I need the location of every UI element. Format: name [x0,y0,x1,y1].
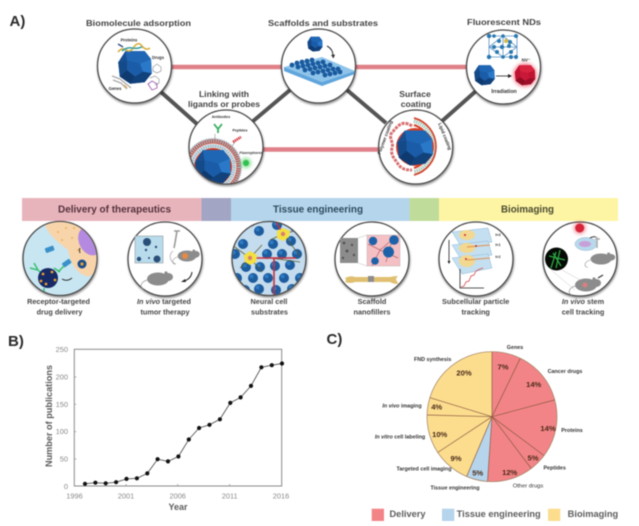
icon: biomolecule adsorption: Drugs [152,55,165,60]
caption: scaffold nanofillers [354,297,390,316]
percentages: 20% [456,368,472,378]
heading: surface coating [399,89,431,109]
slice labels: In vivo imaging [382,404,422,410]
legend [372,509,618,521]
x axis labels: 2006 [169,492,186,500]
percentages: 12% [502,468,518,477]
y axis labels: 100 [56,427,68,436]
band: application categories: Bioimaging [501,204,554,216]
band: application categories [22,198,618,221]
icon: linking with ligands or probes: Peptides [233,128,247,132]
caption: neural cell substrates: substrates [251,308,288,316]
slice labels [375,345,583,492]
caption: neural cell substrates: Neural cell [251,297,287,306]
caption: receptor-targeted drug delivery: drug delivery [37,308,83,316]
icon: receptor-targeted drug delivery [23,218,106,296]
icon: biomolecule adsorption: Proteins [121,38,138,42]
percentages: 9% [451,454,462,463]
heading: biomolecule adsorption: Biomolecule adsorption [86,18,191,28]
icon: fluorescent NDs [466,30,540,104]
band: application categories: Tissue engineering [273,204,363,216]
caption: in vivo stem cell tracking [562,297,605,316]
heading: fluorescent NDs: Fluorescent NDs [467,17,541,27]
y axis labels: 200 [56,372,68,382]
slice labels: In vitro cell labeling [375,434,425,440]
percentages: 7% [498,362,509,372]
caption: in vivo targeted tumor therapy: In vivo targeted [137,297,191,306]
slice labels: Cancer drugs [548,369,582,375]
x axis labels: 2001 [118,492,134,500]
icon: in vivo targeted tumor therapy [128,222,202,296]
slice labels: Tissue engineering [430,486,480,492]
percentages [431,362,556,478]
heading: linking with ligands or probes [188,89,260,109]
slice labels: Peptides [543,466,566,472]
caption: subcellular particle tracking: Subcellular particle [442,297,509,306]
y axis labels: 0 [64,482,68,491]
caption: in vivo targeted tumor therapy: tumor therapy [140,308,190,316]
icon: surface coating: Polymer coating [377,120,394,155]
y axis labels: 250 [56,345,68,354]
y axis labels: 50 [60,454,68,464]
slice labels: Targeted cell imaging [396,466,452,472]
percentages: 14% [540,424,556,433]
icon: scaffolds and substrates [282,29,356,103]
caption: scaffold nanofillers: Scaffold [358,297,386,306]
icon: biomolecule adsorption: Genes [109,86,122,91]
caption: receptor-targeted drug delivery: Receptor-targeted [27,297,90,306]
y axis labels: 150 [56,400,68,409]
legend: Delivery [390,509,426,519]
icon: subcellular particle tracking: t=1 [495,243,501,247]
line chart: publications per year [44,345,289,512]
slice labels: FND synthesis [414,357,451,363]
panel label C: C) [326,331,342,348]
icon: linking with ligands or probes: Antibodies [212,115,230,119]
caption: receptor-targeted drug delivery [27,297,90,316]
x axis labels [66,492,289,500]
slice labels: Proteins [561,428,583,434]
pie chart: publication share by topic [375,345,583,492]
data line [85,364,282,484]
percentages: 4% [431,402,442,412]
heading: surface coating: Surface [399,89,431,99]
x axis labels: 2011 [222,492,238,500]
icon: neural cell substrates [230,220,306,298]
caption: subcellular particle tracking [442,297,509,316]
slice labels: Other drugs [513,484,543,490]
legend: Tissue engineering [457,509,541,519]
percentages: 10% [432,430,448,439]
icon: subcellular particle tracking: t=3 [495,233,501,237]
band: application categories: Delivery of therapeutics [58,204,171,216]
icon: linking with ligands or probes [185,110,263,195]
caption: subcellular particle tracking: tracking [462,308,490,316]
x axis labels: 2016 [273,492,289,500]
icon: scaffold nanofillers [335,222,409,296]
icon: fluorescent NDs: NV⁻ [522,58,531,62]
icon: fluorescent NDs: Irradiation [491,89,517,95]
caption: in vivo stem cell tracking: In vivo stem [562,297,605,306]
slice labels: Genes [507,345,523,351]
icon: linking with ligands or probes: Fluorophores [239,151,263,155]
y axis labels [56,345,68,491]
heading: linking with ligands or probes: Linking with [199,89,249,99]
caption: in vivo stem cell tracking: cell tracking [562,308,604,316]
percentages: 5% [528,454,539,462]
caption: scaffold nanofillers: nanofillers [354,308,390,316]
x axis title: Year [168,502,188,512]
icon: surface coating: Lipid coating [437,122,453,151]
percentages: 14% [526,380,542,389]
icon: in vivo stem cell tracking [543,222,617,296]
heading: scaffolds and substrates: Scaffolds and substrates [268,18,378,28]
icon: subcellular particle tracking [439,222,513,296]
data markers [83,361,284,486]
panel label A: A) [10,13,25,30]
caption: in vivo targeted tumor therapy [137,297,191,316]
icon: surface coating [377,110,453,184]
legend: Bioimaging [568,509,618,519]
connector network [161,67,476,150]
x axis labels: 1996 [66,492,83,500]
icon: biomolecule adsorption [98,29,172,103]
heading: linking with ligands or probes: ligands or probes [188,99,260,109]
panel label B: B) [8,333,24,350]
caption: neural cell substrates [251,297,288,316]
y axis title: Number of publications [44,365,54,467]
percentages: 5% [472,468,483,478]
heading: surface coating: coating [401,99,431,109]
icon: subcellular particle tracking: t=2 [495,255,501,259]
